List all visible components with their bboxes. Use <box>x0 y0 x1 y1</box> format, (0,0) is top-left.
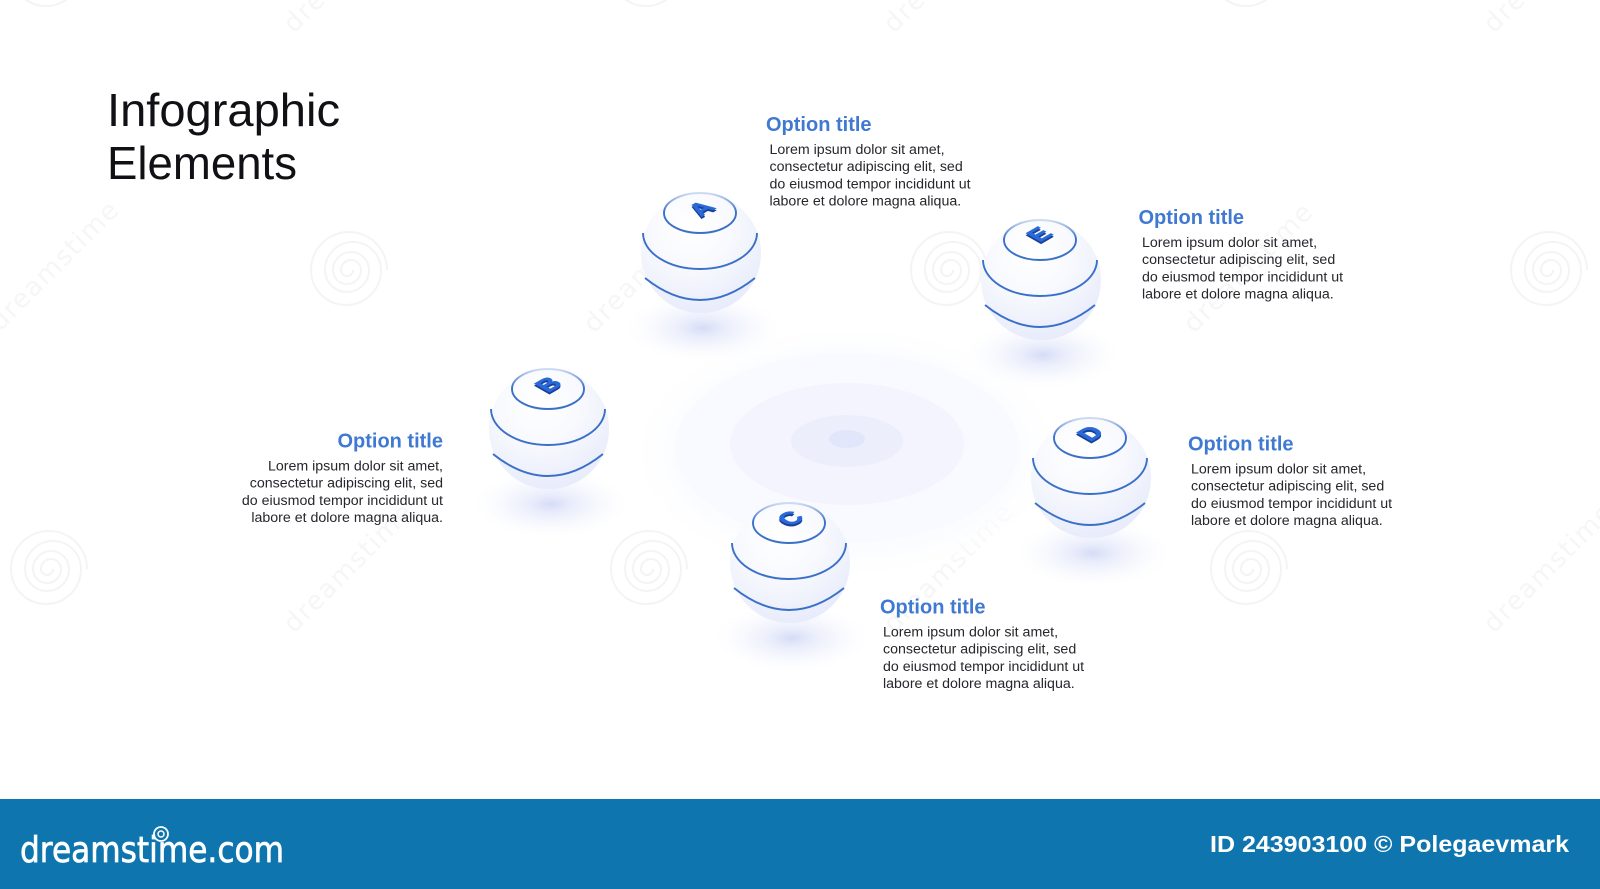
sphere C <box>714 503 870 672</box>
option E text: Lorem ipsum dolor sit amet, <box>1142 235 1317 251</box>
option C text: Option title <box>880 596 986 618</box>
option B text: labore et dolore magna aliqua. <box>251 510 443 526</box>
option E text: do eiusmod tempor incididunt ut <box>1142 269 1343 285</box>
sphere B <box>473 369 629 538</box>
option A text: Lorem ipsum dolor sit amet, <box>770 142 945 158</box>
watermark pattern: dreamstime <box>1178 197 1320 339</box>
central concentric rings <box>622 320 1072 584</box>
option A text: Option title <box>766 114 872 136</box>
option D text: Lorem ipsum dolor sit amet, <box>1191 462 1366 478</box>
option A text: consectetur adipiscing elit, sed <box>770 159 963 175</box>
option A text: labore et dolore magna aliqua. <box>770 194 961 210</box>
sphere D <box>1015 418 1171 587</box>
sphere C: C <box>771 509 811 532</box>
sphere E <box>965 220 1121 389</box>
option D text: do eiusmod tempor incididunt ut <box>1191 496 1392 512</box>
watermark pattern: dreamstime <box>578 197 720 339</box>
option C text: do eiusmod tempor incididunt ut <box>883 659 1084 675</box>
footer bar <box>0 799 1600 889</box>
option A text <box>766 114 971 210</box>
sphere A: A <box>682 199 722 222</box>
option B text <box>242 430 443 526</box>
watermark pattern: dreamstime <box>878 497 1020 639</box>
option D text: labore et dolore magna aliqua. <box>1191 513 1383 529</box>
option D text: consectetur adipiscing elit, sed <box>1191 479 1384 495</box>
sphere D: D <box>1071 424 1111 447</box>
option A text: do eiusmod tempor incididunt ut <box>770 176 971 192</box>
sphere C: C <box>771 507 811 530</box>
sphere E: E <box>1021 223 1059 246</box>
sphere E: E <box>1021 225 1059 248</box>
sphere B: B <box>529 375 569 398</box>
watermark pattern: dreamstime <box>278 497 420 639</box>
sphere B: B <box>529 373 569 396</box>
watermark pattern <box>0 0 1600 639</box>
sphere D: D <box>1071 422 1111 445</box>
option C text: consectetur adipiscing elit, sed <box>883 642 1076 658</box>
title: Infographic <box>107 84 340 136</box>
option B text: Lorem ipsum dolor sit amet, <box>268 458 443 474</box>
option C text: labore et dolore magna aliqua. <box>883 676 1075 692</box>
sphere A <box>625 193 781 362</box>
title <box>107 84 340 189</box>
option D text <box>1188 434 1392 529</box>
title: Elements <box>107 137 297 189</box>
option B text: Option title <box>337 430 443 452</box>
option E text <box>1138 207 1343 303</box>
option B text: do eiusmod tempor incididunt ut <box>242 493 443 509</box>
sphere A: A <box>682 197 722 220</box>
image id credit: ID 243903100 © Polegaevmark <box>1210 831 1570 857</box>
option E text: Option title <box>1138 207 1244 229</box>
option B text: consectetur adipiscing elit, sed <box>250 476 443 492</box>
option E text: labore et dolore magna aliqua. <box>1142 287 1334 303</box>
option C text <box>880 596 1084 692</box>
option E text: consectetur adipiscing elit, sed <box>1142 252 1335 268</box>
option C text: Lorem ipsum dolor sit amet, <box>883 624 1058 640</box>
logo: dreamstime.com <box>20 830 284 871</box>
option D text: Option title <box>1188 434 1294 456</box>
